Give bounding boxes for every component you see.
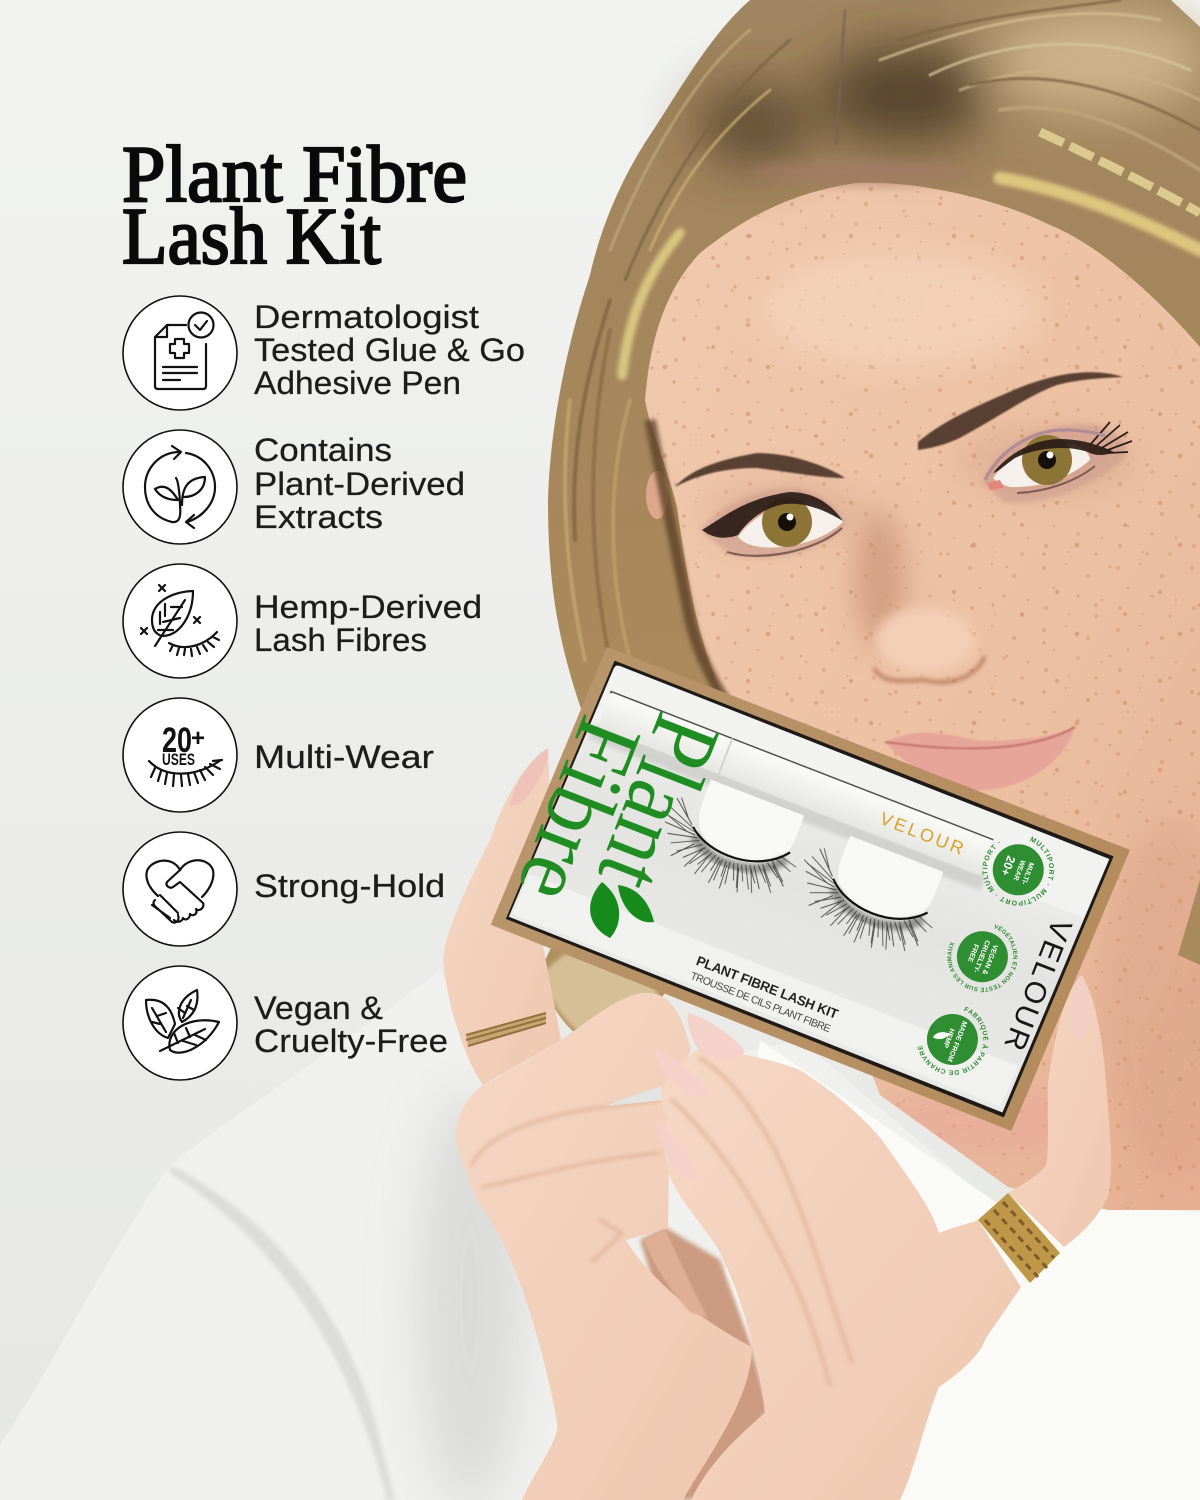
green seal: hemp: HEMP <box>941 1027 955 1049</box>
lash 2 <box>782 843 944 968</box>
text: dermatologist tested <box>254 299 525 401</box>
finger creases <box>672 1058 852 1385</box>
glue pen: VELOUR <box>877 808 967 859</box>
icon: medical document with check <box>123 296 237 410</box>
plant script: Plant <box>578 700 742 905</box>
text: vegan: Cruelty-Free <box>254 1023 448 1059</box>
title <box>122 129 467 281</box>
white tray <box>507 661 1110 1115</box>
green seal: vegan: VÉGÉTALIEN ET NON TESTÉ SUR LES ANIMAUX <box>947 924 1018 993</box>
green seal: multi-wear: WEAR <box>1012 859 1026 881</box>
green seal: vegan: VEGAN & <box>980 943 998 976</box>
fist creases <box>472 1100 660 1262</box>
velour vertical brand: VELOUR <box>997 914 1078 1055</box>
text: dermatologist tested: Dermatologist <box>254 299 479 335</box>
text: dermatologist tested: Tested Glue & Go <box>254 332 525 368</box>
text: plant-derived: Plant-Derived <box>254 466 465 502</box>
sweater shoulder seam <box>170 1165 395 1500</box>
hair part <box>836 10 845 145</box>
feature: plant-derived extracts <box>123 430 465 544</box>
icon: sprout in cycle arrows <box>123 430 237 544</box>
green seal: vegan: CRUELTY- <box>971 939 991 974</box>
left fist <box>456 993 752 1500</box>
text: hemp-derived: Lash Fibres <box>254 622 427 658</box>
ring left <box>466 1013 546 1046</box>
sweater shadow near hand <box>420 1090 520 1500</box>
green leaves <box>590 882 654 938</box>
blond hair below box <box>540 905 660 1040</box>
text: multi-wear: Multi-Wear <box>254 739 434 775</box>
feature: vegan and cruelty-free <box>123 966 448 1080</box>
green seal: hemp: FABRIQUÉ À PARTIR DE CHANVRE <box>918 1006 990 1076</box>
sweater gap between fingers <box>733 1193 787 1285</box>
green seal: multi-wear: MULTIPORT · MULTIPORT · MULTIPORT · <box>982 836 1054 906</box>
icon: leaf and eyelash <box>123 564 237 678</box>
green seal: hemp: MADE FROM <box>946 1020 968 1063</box>
nose <box>874 608 985 682</box>
text: strong-hold: Strong-Hold <box>254 868 445 904</box>
right side hair <box>1178 880 1200 965</box>
icon: 20+ uses lash: 20 <box>162 721 192 760</box>
text: hemp-derived <box>254 589 482 658</box>
inner shadow of hand <box>640 1227 768 1500</box>
text: hemp-derived: Hemp-Derived <box>254 589 482 625</box>
gold ring <box>978 1193 1060 1283</box>
scalp transition <box>750 160 970 184</box>
sweater right brighter <box>690 1040 1200 1500</box>
left brow <box>675 453 845 487</box>
lash 1 <box>645 794 805 909</box>
feature: multi-wear <box>123 698 434 812</box>
blond streaks <box>622 178 1200 375</box>
front fingers <box>662 1050 1021 1500</box>
product box <box>490 647 1130 1131</box>
green seal: multi-wear: 20+ <box>998 854 1018 878</box>
icon: heart handshake <box>123 832 237 946</box>
sweater <box>0 970 1200 1500</box>
green seal: multi-wear: MULTI- <box>1019 861 1035 886</box>
neck and face <box>645 183 1200 1210</box>
fibre script: Fibre <box>499 704 662 916</box>
inner finger fold <box>644 1230 708 1318</box>
pen trough shadow <box>589 724 986 890</box>
kraft frame <box>489 644 1130 1134</box>
thumb <box>1008 975 1111 1247</box>
tray top band <box>590 665 1109 918</box>
icon: 20+ uses lash: USES <box>162 751 195 769</box>
text: plant-derived <box>254 432 465 535</box>
freckles <box>640 170 1200 1210</box>
face shading <box>705 250 1200 1180</box>
text: plant-derived: Contains <box>254 432 392 468</box>
lips <box>885 727 1075 791</box>
right eye <box>982 422 1132 503</box>
green seal: vegan: FREE <box>966 943 979 963</box>
lash cup 2 <box>824 836 943 939</box>
icon: three leaves <box>123 966 237 1080</box>
hair back <box>538 0 1200 1040</box>
text: vegan: Vegan & <box>254 990 383 1026</box>
icon: 20+ uses lash: + <box>191 725 205 752</box>
thumb nail <box>1071 976 1092 1042</box>
tray bottom band <box>511 874 1019 1107</box>
outer lashes <box>1090 422 1132 453</box>
hair strands <box>565 0 1200 660</box>
lash cup 1 <box>685 780 804 883</box>
french product name: TROUSSE DE CILS PLANT FIBRE <box>689 970 833 1035</box>
notch gap <box>606 1086 664 1106</box>
text: vegan <box>254 990 448 1059</box>
nails <box>655 1013 745 1179</box>
ear <box>646 471 668 519</box>
text: plant-derived: Extracts <box>254 499 383 535</box>
glue pen <box>597 692 993 875</box>
feature: hemp-derived <box>123 564 482 678</box>
feature: strong-hold <box>123 832 445 946</box>
product name: PLANT FIBRE LASH KIT <box>694 953 841 1022</box>
braid <box>1040 132 1200 213</box>
left eye <box>700 488 846 558</box>
title: Plant Fibre <box>122 129 467 219</box>
text: dermatologist tested: Adhesive Pen <box>254 365 461 401</box>
right brow <box>918 372 1123 450</box>
title: Lash Kit <box>122 191 381 281</box>
hair top shading <box>695 10 1200 165</box>
dark hair along face <box>650 420 725 700</box>
behind-box finger <box>443 748 561 1085</box>
feature: dermatologist tested <box>123 296 525 410</box>
icon: 20+ uses lash <box>123 698 237 812</box>
inner shadow <box>504 658 1114 1120</box>
nail <box>510 749 548 805</box>
